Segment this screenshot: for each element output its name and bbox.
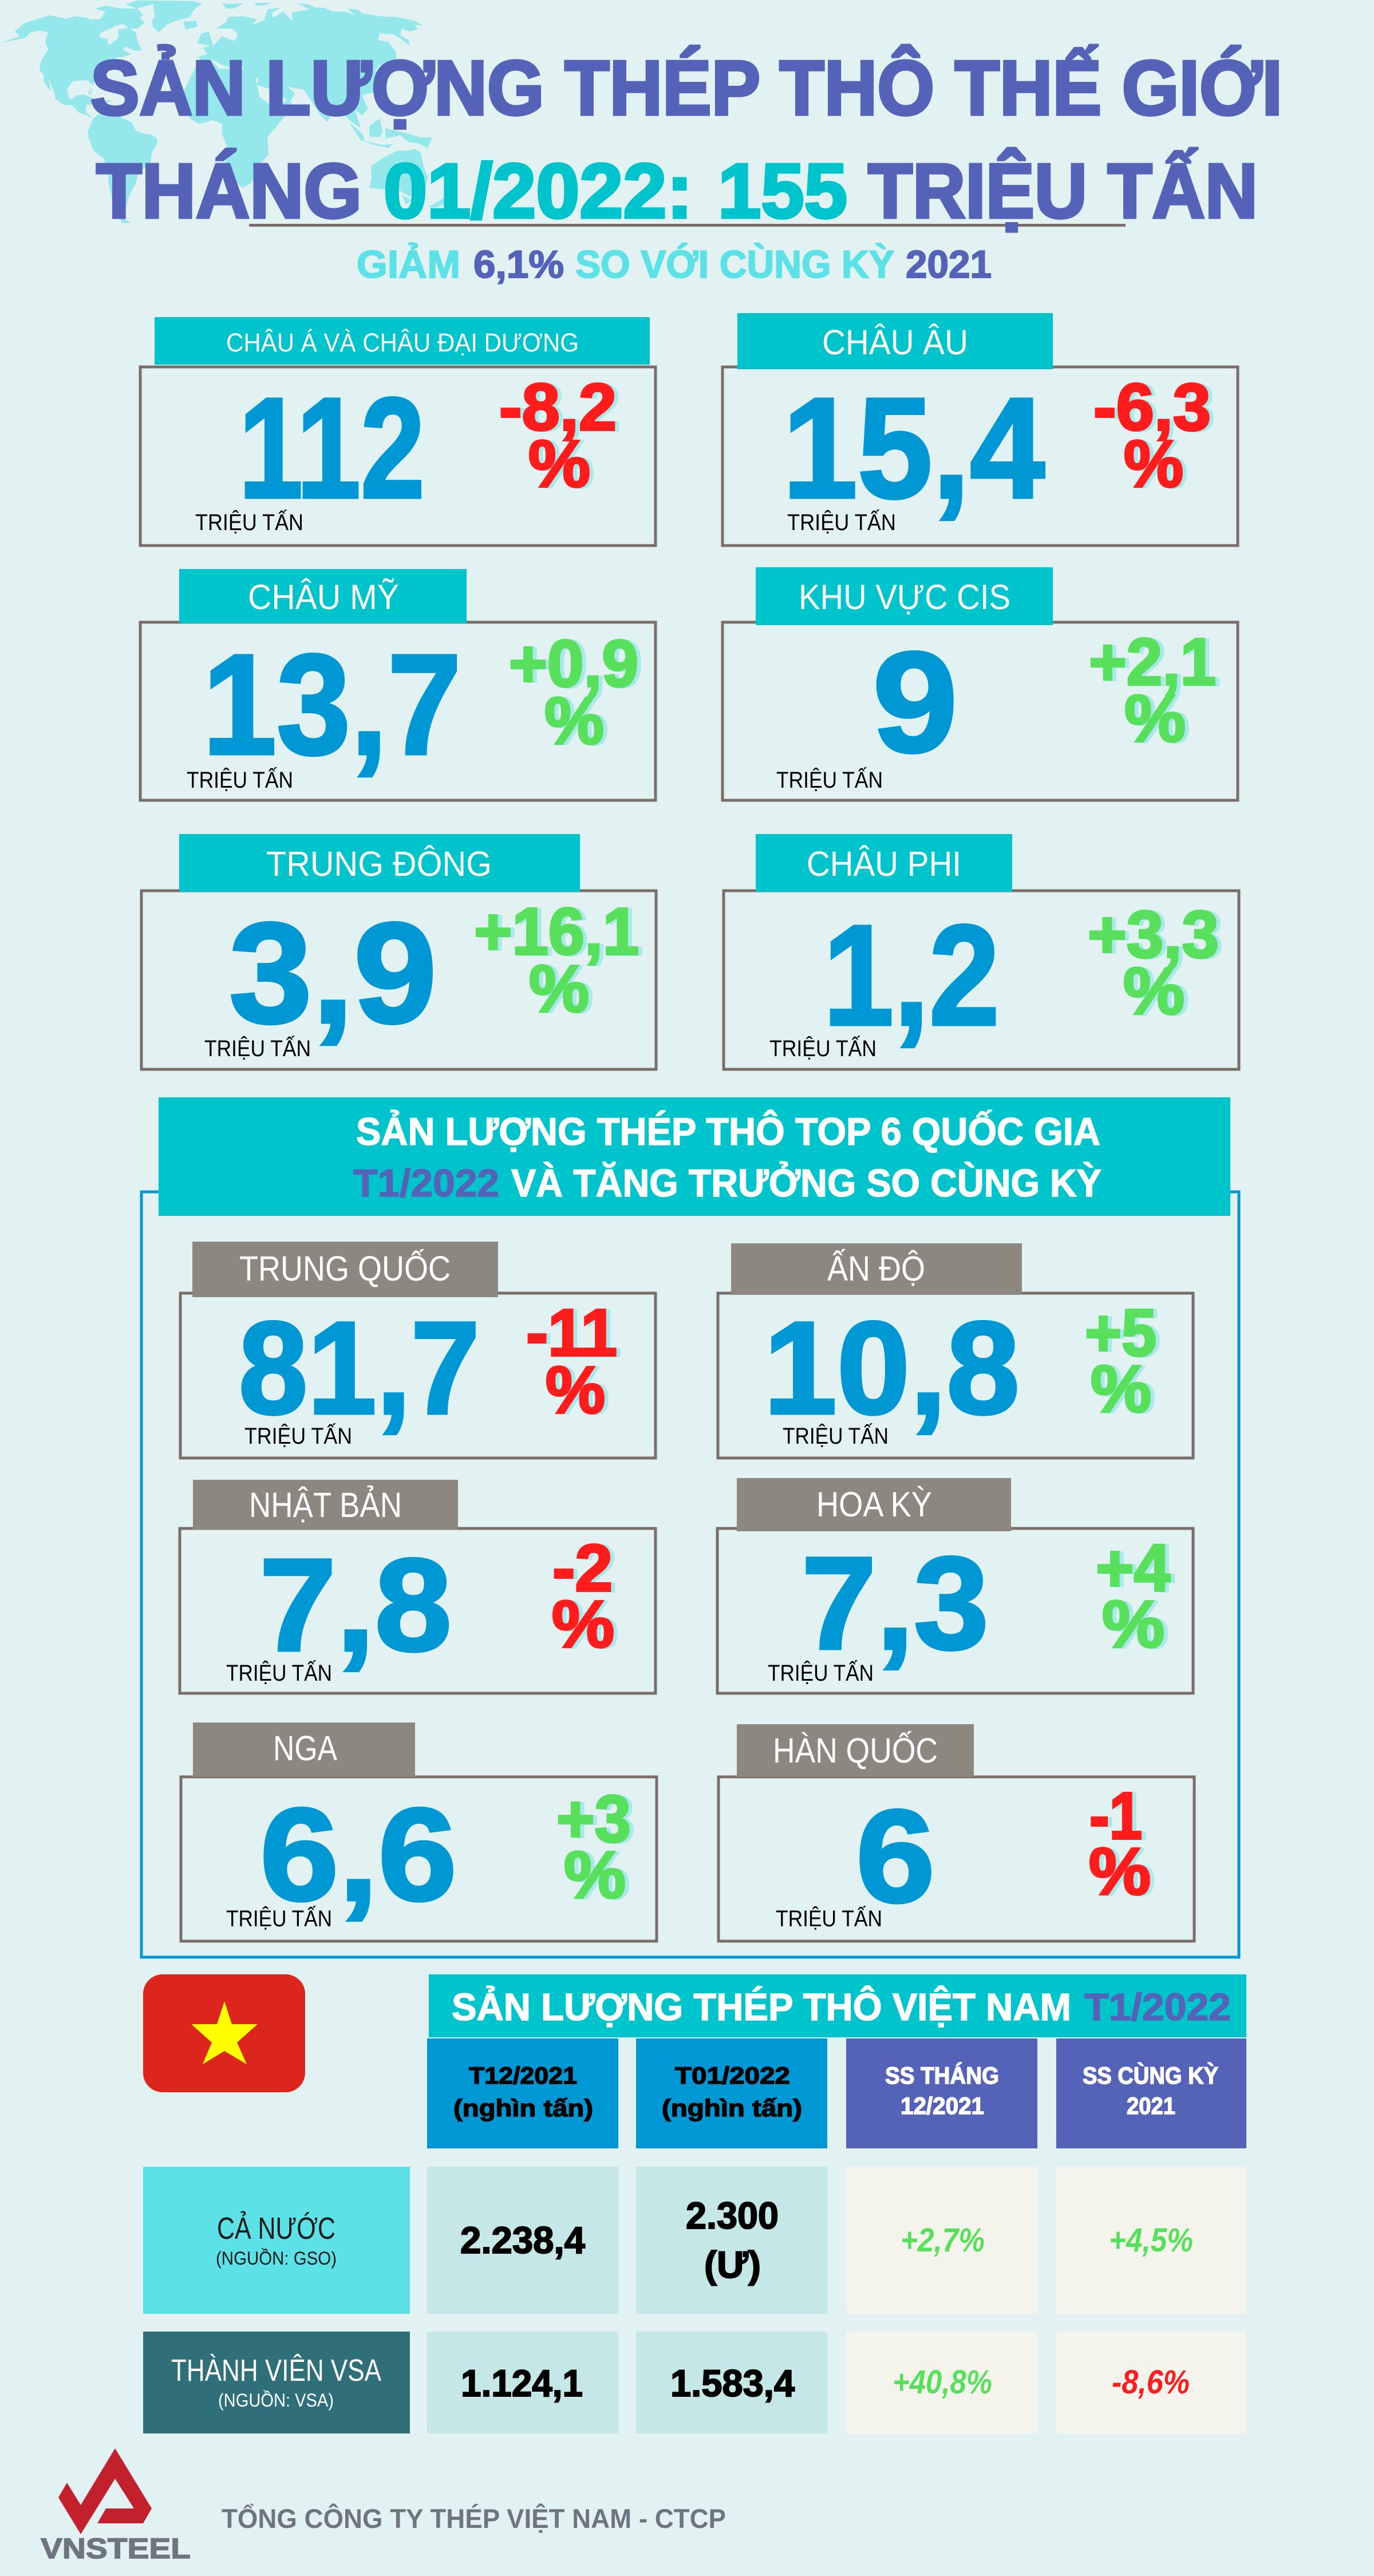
panel: Americas: CHÂU MỸ bbox=[248, 578, 399, 617]
panel: Africa: % bbox=[1123, 954, 1185, 1028]
panel: Africa: TRIỆU TẤN bbox=[769, 1035, 876, 1061]
title: TRIỆU TẤN bbox=[868, 148, 1258, 234]
panel: Americas: TRIỆU TẤN bbox=[187, 767, 293, 793]
logo: VNSTEEL bbox=[41, 2448, 191, 2565]
panel: United States: % bbox=[1102, 1587, 1164, 1661]
icon: Vietnam flag bbox=[143, 1974, 305, 2092]
panel: United States: TRIỆU TẤN bbox=[768, 1660, 874, 1686]
panel: Africa bbox=[724, 834, 1239, 1069]
panel: Japan: 7,8 bbox=[259, 1531, 452, 1678]
panel: Middle East: % bbox=[529, 951, 589, 1026]
table row: whole country: (NGUỒN: GSO) bbox=[216, 2248, 337, 2269]
table header: T12/2021: T12/2021 bbox=[469, 2062, 577, 2089]
panel: Asia and Oceania: TRIỆU TẤN bbox=[195, 509, 303, 535]
panel: Africa: CHÂU PHI bbox=[807, 844, 961, 883]
panel: Europe: -6,3 bbox=[1093, 370, 1211, 444]
table row: whole country: 2.300 bbox=[686, 2194, 779, 2237]
panel: India: +5 bbox=[1085, 1295, 1156, 1370]
table header: T01/2022: T01/2022 bbox=[675, 2062, 790, 2089]
panel: South Korea bbox=[718, 1724, 1194, 1941]
panel: Russia bbox=[181, 1722, 657, 1941]
title: THÁNG bbox=[96, 148, 362, 234]
panel: Europe: % bbox=[1124, 426, 1183, 501]
panel: Europe: 15,4 bbox=[783, 368, 1045, 528]
subtitle bbox=[357, 242, 992, 286]
table row: whole country: 2.238,4 bbox=[460, 2219, 585, 2261]
heading: top 6 countries: T1/2022 bbox=[353, 1161, 499, 1205]
table row: whole country: +4,5% bbox=[1109, 2222, 1193, 2259]
panel: Europe: TRIỆU TẤN bbox=[787, 509, 896, 535]
panel: Americas: % bbox=[544, 683, 604, 758]
panel: Europe bbox=[722, 313, 1238, 546]
heading: Vietnam output: T1/2022 bbox=[1084, 1986, 1231, 2029]
panel: India: % bbox=[1091, 1352, 1151, 1426]
panel: India: ẤN ĐỘ bbox=[827, 1249, 925, 1288]
table row: whole country: CẢ NƯỚC bbox=[217, 2211, 335, 2246]
title: 155 bbox=[718, 148, 847, 234]
panel: China: TRIỆU TẤN bbox=[244, 1423, 352, 1449]
panel: Asia and Oceania: CHÂU Á VÀ CHÂU ĐẠI DƯƠNG bbox=[226, 328, 579, 357]
table row: VSA members bbox=[143, 2332, 1246, 2433]
panel: Middle East: TRIỆU TẤN bbox=[204, 1035, 311, 1061]
panel: Japan: -2 bbox=[552, 1531, 613, 1605]
panel: India bbox=[718, 1243, 1193, 1458]
subtitle: GIẢM bbox=[357, 242, 460, 286]
subtitle: SO VỚI CÙNG KỲ bbox=[575, 243, 894, 286]
heading: top 6 countries: VÀ TĂNG TRƯỞNG SO CÙNG KỲ bbox=[511, 1161, 1101, 1205]
table row: VSA members: 1.583,4 bbox=[670, 2362, 795, 2404]
panel: Russia: % bbox=[564, 1838, 626, 1912]
panel: India: TRIỆU TẤN bbox=[783, 1423, 889, 1449]
panel: Russia: TRIỆU TẤN bbox=[226, 1905, 332, 1931]
panel: Asia and Oceania bbox=[140, 317, 656, 546]
panel: United States: +4 bbox=[1096, 1531, 1170, 1605]
panel: Africa: 1,2 bbox=[823, 895, 1000, 1055]
panel: Russia: 6,6 bbox=[260, 1781, 457, 1928]
logo: VNSTEEL: VNSTEEL bbox=[41, 2532, 191, 2565]
panel: China: TRUNG QUỐC bbox=[239, 1249, 451, 1288]
panel: Asia and Oceania: % bbox=[528, 426, 590, 501]
table header: T12/2021: (nghìn tấn) bbox=[453, 2095, 593, 2121]
title: SẢN LƯỢNG THÉP THÔ THẾ GIỚI bbox=[90, 45, 1282, 131]
panel: China bbox=[180, 1242, 656, 1458]
panel: CIS: TRIỆU TẤN bbox=[776, 767, 883, 793]
panel: Japan: TRIỆU TẤN bbox=[226, 1660, 332, 1686]
panel: Russia: +3 bbox=[556, 1781, 631, 1856]
divider under title bbox=[249, 224, 1126, 227]
table header: compared with same period 2021 bbox=[1056, 2038, 1246, 2148]
table row: VSA members: THÀNH VIÊN VSA bbox=[171, 2353, 381, 2388]
table header: T01/2022 bbox=[636, 2038, 827, 2148]
panel: Americas: 13,7 bbox=[203, 625, 461, 784]
title bbox=[90, 45, 1282, 234]
table header: compared with same period 2021: SS CÙNG KỲ bbox=[1083, 2061, 1218, 2089]
panel: Asia and Oceania: 112 bbox=[239, 368, 425, 528]
panel: top 6 countries frame bbox=[141, 1192, 1239, 1957]
panel: Europe: CHÂU ÂU bbox=[822, 323, 968, 362]
subtitle: 2021 bbox=[906, 243, 992, 286]
panel: Japan: % bbox=[552, 1587, 614, 1661]
panel: United States bbox=[717, 1478, 1193, 1693]
table row: VSA members: -8,6% bbox=[1112, 2364, 1190, 2401]
panel: South Korea: TRIỆU TẤN bbox=[776, 1905, 882, 1931]
panel: Middle East: +16,1 bbox=[474, 894, 639, 969]
table row: VSA members: (NGUỒN: VSA) bbox=[218, 2390, 334, 2411]
panel: United States: 7,3 bbox=[802, 1530, 989, 1677]
panel: Japan: NHẬT BẢN bbox=[249, 1485, 402, 1524]
table header: compared with December 2021: 12/2021 bbox=[901, 2092, 984, 2119]
panel: Asia and Oceania: -8,2 bbox=[499, 370, 617, 444]
subtitle: 6,1% bbox=[473, 243, 564, 286]
footer: company name: TỔNG CÔNG TY THÉP VIỆT NAM - CTCP bbox=[222, 2503, 726, 2534]
panel: South Korea: 6 bbox=[856, 1783, 935, 1930]
table header: compared with December 2021 bbox=[846, 2038, 1037, 2148]
panel: CIS bbox=[722, 567, 1238, 800]
panel: United States: HOA KỲ bbox=[816, 1485, 932, 1524]
panel: CIS: +2,1 bbox=[1089, 625, 1216, 699]
title: 01/2022: bbox=[384, 148, 693, 234]
panel: Americas: +0,9 bbox=[509, 626, 638, 701]
panel: Russia: NGA bbox=[273, 1729, 337, 1768]
table row: whole country bbox=[143, 2167, 1246, 2314]
table row: whole country: +2,7% bbox=[901, 2222, 985, 2259]
panel: China: % bbox=[546, 1353, 605, 1427]
heading: Vietnam output bbox=[429, 1974, 1246, 2037]
table header: T12/2021 bbox=[427, 2038, 618, 2148]
heading: Vietnam output: SẢN LƯỢNG THÉP THÔ VIỆT NAM bbox=[452, 1986, 1071, 2029]
panel: Africa: +3,3 bbox=[1088, 897, 1219, 971]
heading: top 6 countries bbox=[159, 1097, 1230, 1216]
table row: VSA members: +40,8% bbox=[893, 2364, 992, 2401]
panel: China: 81,7 bbox=[239, 1294, 480, 1441]
table header: compared with same period 2021: 2021 bbox=[1127, 2092, 1175, 2119]
panel: Middle East bbox=[141, 834, 656, 1069]
panel: CIS: KHU VỰC CIS bbox=[799, 578, 1010, 617]
panel: Middle East: 3,9 bbox=[229, 893, 437, 1053]
panel: India: 10,8 bbox=[764, 1294, 1020, 1441]
panel: Japan bbox=[180, 1480, 656, 1693]
panel: CIS: % bbox=[1124, 681, 1186, 756]
panel: Americas bbox=[140, 569, 656, 800]
table row: whole country: (Ư) bbox=[704, 2243, 761, 2286]
panel: CIS: 9 bbox=[872, 622, 958, 782]
table row: VSA members: 1.124,1 bbox=[461, 2362, 583, 2404]
panel: South Korea: % bbox=[1089, 1834, 1151, 1909]
panel: South Korea: HÀN QUỐC bbox=[773, 1731, 938, 1770]
heading: top 6 countries: SẢN LƯỢNG THÉP THÔ TOP 6 QUỐC GIA bbox=[356, 1109, 1100, 1153]
world map background bbox=[0, 1, 453, 223]
panel: China: -11 bbox=[526, 1295, 617, 1370]
table header: compared with December 2021: SS THÁNG bbox=[885, 2062, 999, 2089]
panel: South Korea: -1 bbox=[1089, 1779, 1142, 1853]
panel: Middle East: TRUNG ĐÔNG bbox=[266, 844, 492, 883]
table header: T01/2022: (nghìn tấn) bbox=[662, 2095, 802, 2121]
